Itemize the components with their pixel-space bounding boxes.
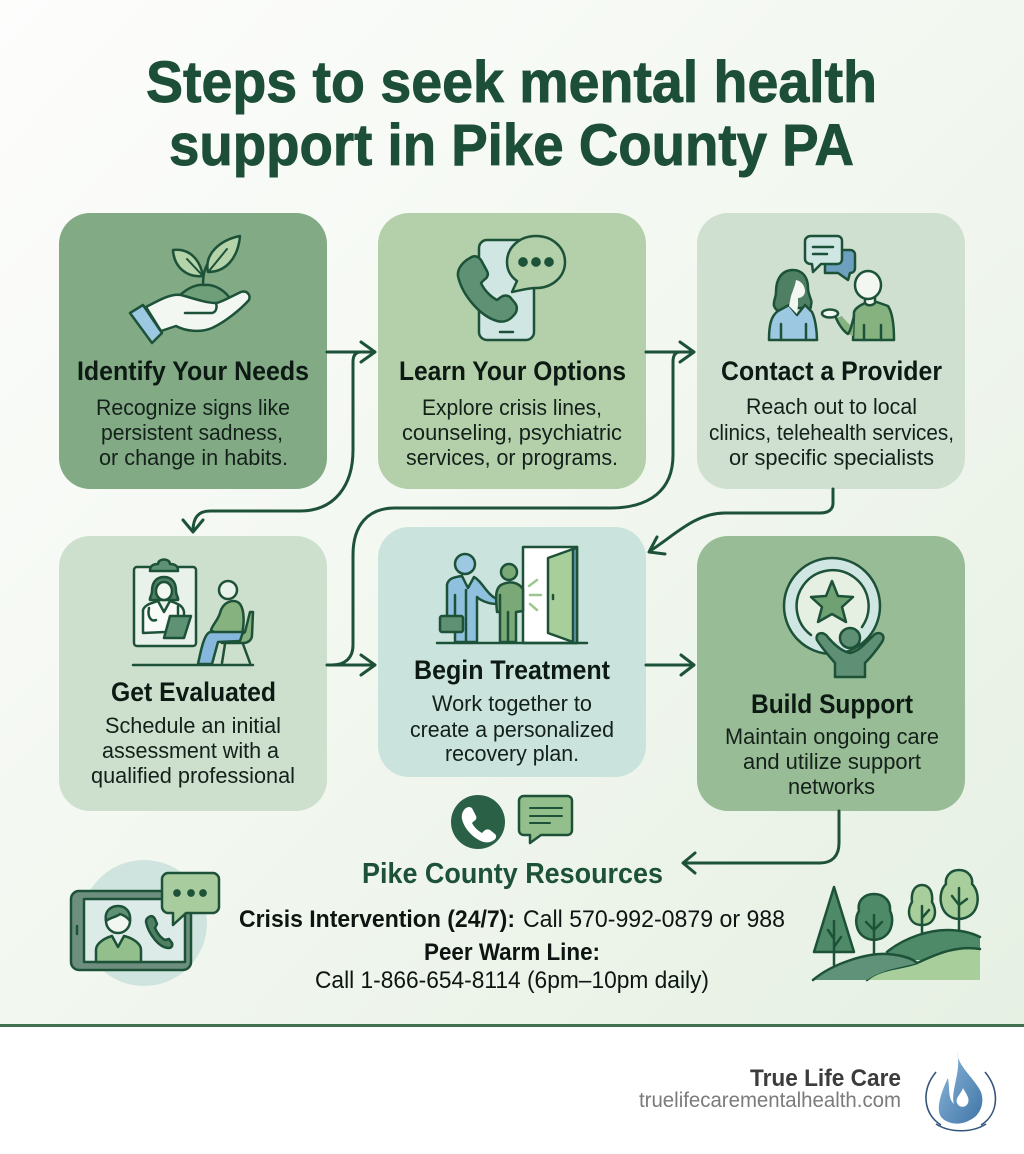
resources text: Peer Warm Line: xyxy=(424,939,600,966)
panel: Get Evaluated xyxy=(59,536,327,811)
description: Schedule an initial xyxy=(105,713,281,738)
description: Work together to xyxy=(432,691,592,716)
resources text xyxy=(239,906,785,994)
description xyxy=(91,713,295,788)
footer band xyxy=(0,1024,1024,1154)
description xyxy=(410,691,614,766)
icon: person lifting star in circle xyxy=(784,558,883,677)
description: assessment with a xyxy=(102,738,279,763)
icon: two people talking xyxy=(769,236,894,340)
resources text: Call 1-866-654-8114 (6pm–10pm daily) xyxy=(315,967,709,994)
icon: doctor on clipboard and seated patient xyxy=(133,560,253,665)
heading: Pike County Resources: Pike County Resources xyxy=(362,858,663,890)
heading: Contact a Provider xyxy=(721,356,942,386)
description: Maintain ongoing care xyxy=(725,724,939,749)
description: counseling, psychiatric xyxy=(402,420,622,445)
arrow: Contact to Treatment xyxy=(649,489,833,554)
description: or change in habits. xyxy=(99,445,288,470)
title: Steps to seek mental health xyxy=(146,50,877,115)
description: recovery plan. xyxy=(445,741,579,766)
arrow: Learn to Contact and Treatment xyxy=(327,342,694,675)
description: create a personalized xyxy=(410,717,614,742)
arrow: Identify to Learn and Evaluate xyxy=(183,342,375,532)
description: clinics, telehealth services, xyxy=(709,420,954,445)
description: or specific specialists xyxy=(729,445,934,470)
arrow: Treatment to Support xyxy=(646,655,694,675)
panel: Contact a Provider xyxy=(697,213,965,489)
arrow: Support to Resources xyxy=(683,811,839,873)
icon: trees and hills xyxy=(813,870,980,980)
description xyxy=(725,724,939,799)
description: persistent sadness, xyxy=(101,420,283,445)
heading: Begin Treatment xyxy=(414,655,610,685)
description: and utilize support xyxy=(743,749,922,774)
heading: Build Support xyxy=(751,689,913,719)
description xyxy=(402,395,622,470)
icon: hand holding seedling xyxy=(130,236,250,343)
description: qualified professional xyxy=(91,763,295,788)
icon: message bubble xyxy=(519,796,572,843)
panel: Begin Treatment xyxy=(378,527,646,777)
resources text: Call 570-992-0879 or 988 xyxy=(523,906,785,933)
description: services, or programs. xyxy=(406,445,618,470)
footer brand text xyxy=(639,1065,901,1112)
icon: phone badge xyxy=(451,795,505,849)
panel: Learn Your Options xyxy=(378,213,646,489)
resources text: Crisis Intervention (24/7): xyxy=(239,906,515,933)
heading: Learn Your Options xyxy=(399,356,626,386)
title: support in Pike County PA xyxy=(169,113,854,178)
footer brand text: truelifecarementalhealth.com xyxy=(639,1089,901,1112)
description: Recognize signs like xyxy=(96,395,290,420)
logo: blue flame drop xyxy=(926,1052,995,1131)
description: Explore crisis lines, xyxy=(422,395,602,420)
icon: telehealth tablet xyxy=(71,860,219,986)
title xyxy=(146,50,877,178)
icon: two people at open door xyxy=(437,547,587,643)
description: networks xyxy=(788,774,875,799)
panel: Build Support xyxy=(697,536,965,811)
description xyxy=(96,395,290,470)
footer brand text: True Life Care xyxy=(750,1065,901,1092)
description: Reach out to local xyxy=(746,394,917,419)
panel: Identify Your Needs xyxy=(59,213,327,489)
heading: Identify Your Needs xyxy=(77,356,309,386)
description xyxy=(709,394,954,470)
icon: phone with speech bubble xyxy=(458,236,565,340)
heading: Get Evaluated xyxy=(111,677,276,707)
